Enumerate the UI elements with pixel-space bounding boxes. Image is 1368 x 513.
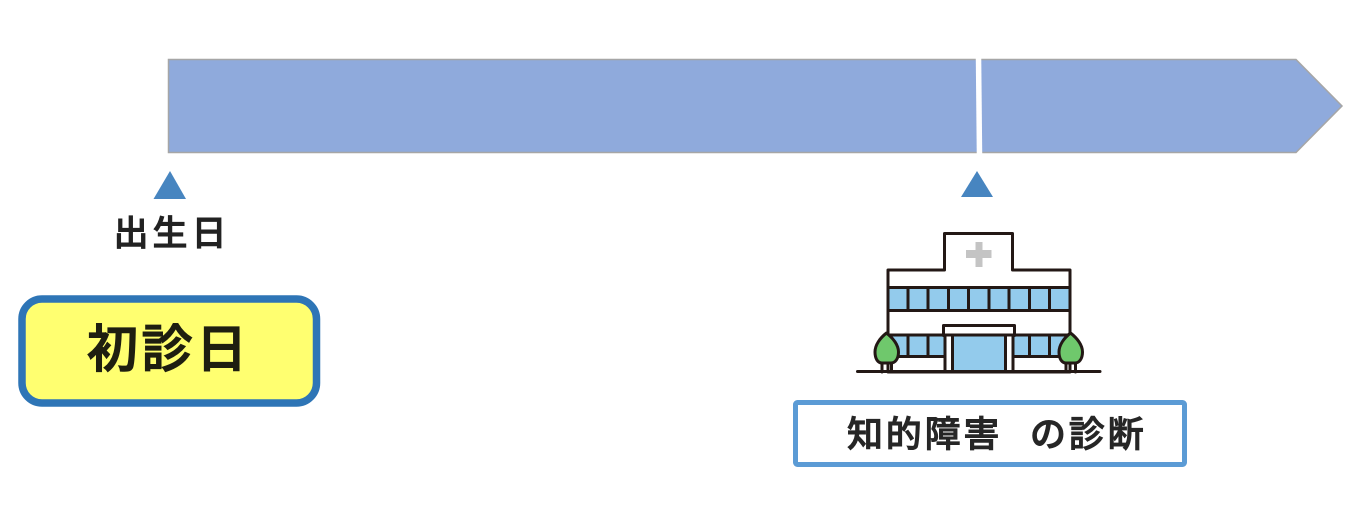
callout: first visit date: [22, 299, 316, 403]
icon: medical cross: [966, 242, 992, 267]
icon: hospital: [858, 234, 1100, 372]
tree right: [1059, 333, 1082, 372]
tree left: [875, 333, 898, 372]
marker: diagnosis triangle: [961, 171, 993, 197]
hospital building body: [888, 234, 1070, 372]
upper windows: [888, 288, 1070, 310]
callout: diagnosis: の診断: [1030, 414, 1146, 454]
timeline arrow: [168, 56, 1342, 156]
entrance: [944, 326, 1014, 372]
label: birth date: 出生日: [114, 214, 231, 254]
callout: first visit date: 初診日: [87, 321, 251, 378]
lower windows: [888, 335, 1070, 356]
callout: diagnosis: [796, 402, 1184, 464]
marker: birth date triangle: [154, 171, 186, 199]
callout: diagnosis: 知的障害: [847, 414, 1002, 454]
ground line: [858, 370, 1100, 373]
